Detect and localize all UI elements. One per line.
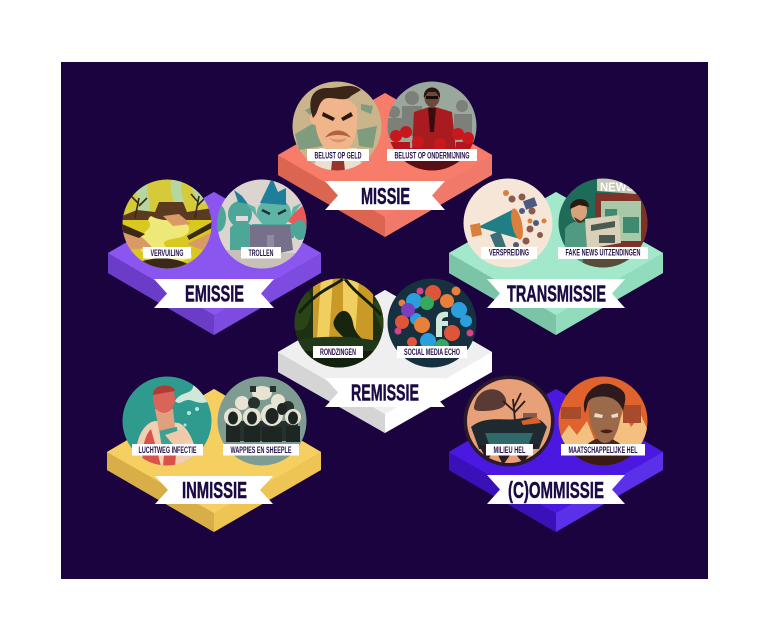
label: verspreiding: VERSPREIDING bbox=[489, 248, 529, 259]
label: vervuiling bbox=[143, 247, 191, 259]
icon: social media echo bbox=[387, 278, 477, 368]
icon: milieu hel bbox=[464, 376, 554, 466]
banner: inmissie bbox=[155, 476, 273, 504]
label: fake news uitzendingen: FAKE NEWS UITZENDINGEN bbox=[566, 248, 641, 259]
banner: missie: MISSIE bbox=[361, 183, 410, 209]
icon: fake news uitzendingen: NEWS bbox=[600, 180, 634, 194]
label: wappies en sheeple bbox=[223, 444, 299, 456]
label: fake news uitzendingen bbox=[558, 247, 648, 259]
label: trollen bbox=[241, 247, 281, 259]
label: belust op geld: BELUST OP GELD bbox=[314, 151, 362, 162]
icon: fake news uitzendingen bbox=[558, 177, 648, 268]
label: social media echo bbox=[397, 346, 467, 358]
platform: emissie bbox=[108, 192, 321, 335]
label: maatschappelijke hel bbox=[561, 444, 645, 456]
banner: commissie bbox=[487, 475, 625, 504]
banner: commissie: (C)OMMISSIE bbox=[508, 477, 604, 503]
label: belust op geld bbox=[307, 149, 369, 162]
platform: missie bbox=[278, 93, 492, 237]
platform: transmissie bbox=[449, 192, 663, 335]
label: wappies en sheeple: WAPPIES EN SHEEPLE bbox=[230, 445, 292, 456]
label: rondzingen bbox=[313, 346, 363, 358]
panel: inmissie bbox=[107, 376, 321, 532]
platform: remissie bbox=[278, 290, 492, 433]
panel: missie bbox=[278, 81, 492, 237]
icon: luchtweg infectie bbox=[122, 376, 212, 466]
panel: emissie bbox=[108, 178, 321, 335]
background panel bbox=[61, 62, 708, 579]
banner: missie bbox=[325, 181, 445, 210]
icon: verspreiding bbox=[463, 178, 553, 268]
label: luchtweg infectie bbox=[132, 444, 203, 456]
icon: belust op geld bbox=[292, 81, 382, 171]
platform: commissie bbox=[449, 389, 663, 532]
label: belust op ondermijning bbox=[387, 149, 477, 162]
banner: remissie: REMISSIE bbox=[351, 380, 419, 406]
label: luchtweg infectie: LUCHTWEG INFECTIE bbox=[138, 445, 196, 456]
label: rondzingen: RONDZINGEN bbox=[320, 347, 356, 358]
banner: remissie bbox=[325, 378, 445, 407]
label: verspreiding bbox=[481, 247, 537, 259]
banner: inmissie: INMISSIE bbox=[182, 477, 247, 503]
banner: transmissie: TRANSMISSIE bbox=[507, 280, 606, 306]
banner: emissie bbox=[154, 279, 274, 308]
icon: maatschappelijke hel bbox=[558, 376, 648, 466]
label: trollen: TROLLEN bbox=[248, 248, 274, 259]
panel: remissie bbox=[278, 278, 492, 433]
label: milieu hel: MILIEU HEL bbox=[494, 445, 526, 456]
panel: transmissie bbox=[449, 177, 663, 335]
label: maatschappelijke hel: MAATSCHAPPELIJKE HEL bbox=[568, 445, 638, 456]
icon: rondzingen bbox=[294, 278, 384, 368]
icon: belust op ondermijning bbox=[387, 81, 477, 171]
label: vervuiling: VERVUILING bbox=[150, 248, 184, 259]
label: belust op ondermijning: BELUST OP ONDERMIJNING bbox=[394, 151, 470, 162]
icon: vervuiling bbox=[122, 179, 212, 269]
platform: inmissie bbox=[107, 389, 321, 532]
label: milieu hel bbox=[486, 444, 533, 456]
banner: emissie: EMISSIE bbox=[185, 280, 244, 306]
banner: transmissie bbox=[487, 279, 625, 308]
icon: trollen bbox=[218, 180, 306, 268]
icon: wappies en sheeple bbox=[217, 376, 307, 466]
panel: commissie bbox=[449, 376, 663, 532]
label: social media echo: SOCIAL MEDIA ECHO bbox=[404, 347, 460, 358]
